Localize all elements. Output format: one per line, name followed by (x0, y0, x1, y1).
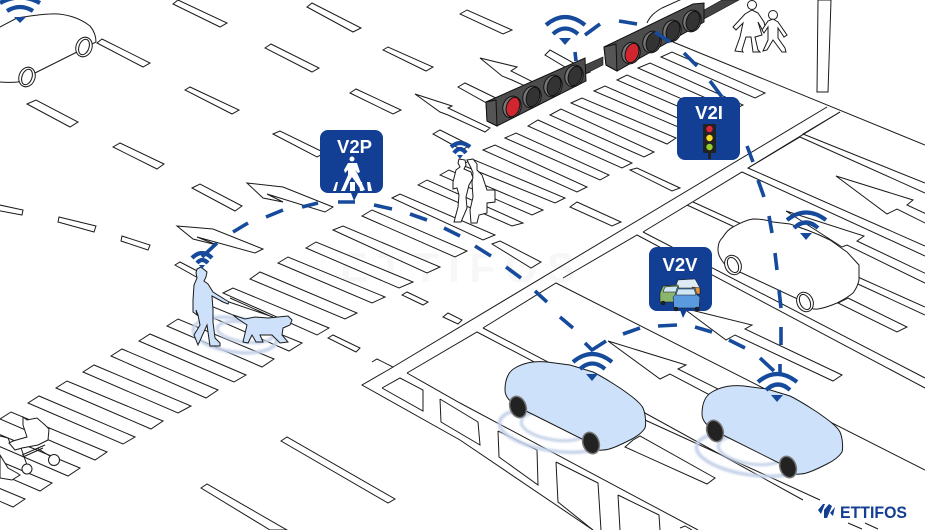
badge: V2P: V2P (337, 136, 372, 157)
traffic light: right (604, 3, 704, 71)
road arrows (177, 58, 925, 484)
wifi: pedestrians (451, 143, 470, 159)
traffic light: left (486, 58, 586, 126)
crosswalk stripes (0, 52, 765, 507)
car 2: ego vehicle (694, 386, 843, 483)
icon: three cars (660, 279, 700, 311)
traffic signal mast arm (585, 57, 603, 74)
connection line behind the traffic light (647, 0, 682, 23)
woman walking dog (193, 267, 292, 346)
badge: V2V: V2V (663, 254, 698, 275)
watermark: ETTIFOS (340, 244, 575, 291)
car: top left (0, 14, 96, 89)
car 1: ego vehicle (497, 362, 646, 459)
dashed link: V2V (592, 325, 774, 371)
pedestrians top right (733, 0, 787, 52)
wifi: car 1 (573, 354, 612, 381)
wifi: traffic light (546, 17, 585, 45)
badge: V2V (649, 247, 712, 318)
road edge lines and islands (362, 42, 925, 530)
badge: V2P (320, 130, 383, 201)
icon: traffic signal (703, 124, 716, 159)
street pole (817, 0, 831, 92)
wifi: white car (787, 212, 826, 240)
wifi: top left car (0, 0, 40, 23)
pedestrians centre (453, 159, 495, 223)
white car (718, 219, 859, 314)
badge: V2I (677, 97, 740, 160)
dashed link: V2P (202, 202, 593, 351)
logo: ETTIFOS: ETTIFOS (840, 504, 907, 522)
badge: V2I: V2I (695, 102, 723, 123)
signal rings under woman and dog (191, 312, 279, 358)
wifi: woman (192, 253, 212, 269)
wifi: car 2 (758, 374, 797, 402)
stroller (0, 417, 60, 480)
dashed link: V2I (575, 21, 781, 373)
icon: logo mark (818, 504, 835, 518)
icon: pedestrian crossing (333, 156, 372, 191)
